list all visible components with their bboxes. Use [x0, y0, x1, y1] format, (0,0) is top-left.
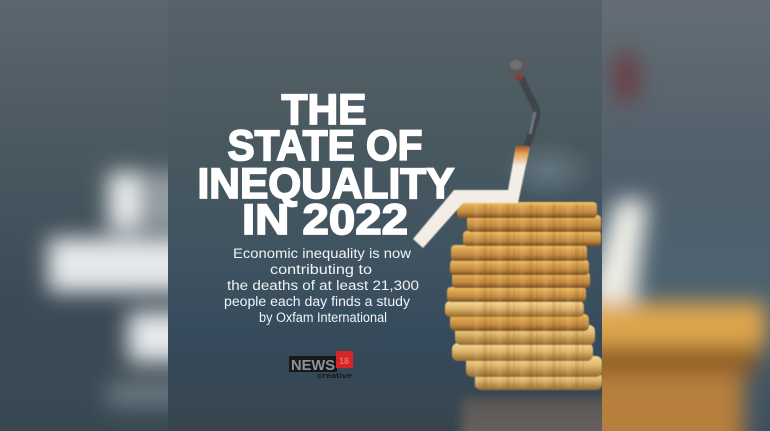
subtitle text block: Economic inequality is now: [233, 246, 411, 261]
subtitle text block: people each day finds a study: [224, 294, 410, 309]
subtitle text block: contributing to: [270, 262, 372, 277]
panel: central photo: [168, 0, 612, 431]
title: IN 2022: [242, 196, 408, 244]
title: [198, 86, 454, 244]
title: STATE OF: [228, 122, 422, 170]
coin reflection: [462, 398, 612, 431]
coin stack: [445, 202, 602, 390]
burnt match: [413, 57, 537, 248]
logo: News18 Creative: 18: [339, 356, 349, 366]
logo: News18 Creative: [289, 351, 353, 380]
logo: News18 Creative: creative: [317, 373, 352, 380]
match stick: [413, 146, 530, 248]
charred stem: [521, 76, 537, 146]
smoke: [522, 148, 583, 192]
subtitle text block: by Oxfam International: [259, 310, 387, 325]
panel: blurred left background: [0, 0, 168, 414]
title: THE: [282, 86, 366, 134]
subtitle text block: [224, 246, 419, 325]
panel: blurred right background: [602, 0, 770, 431]
match head: [508, 58, 526, 78]
subtitle text block: the deaths of at least 21,300: [227, 278, 419, 293]
logo: News18 Creative: NEWS: [291, 358, 335, 374]
title: INEQUALITY: [198, 160, 454, 208]
